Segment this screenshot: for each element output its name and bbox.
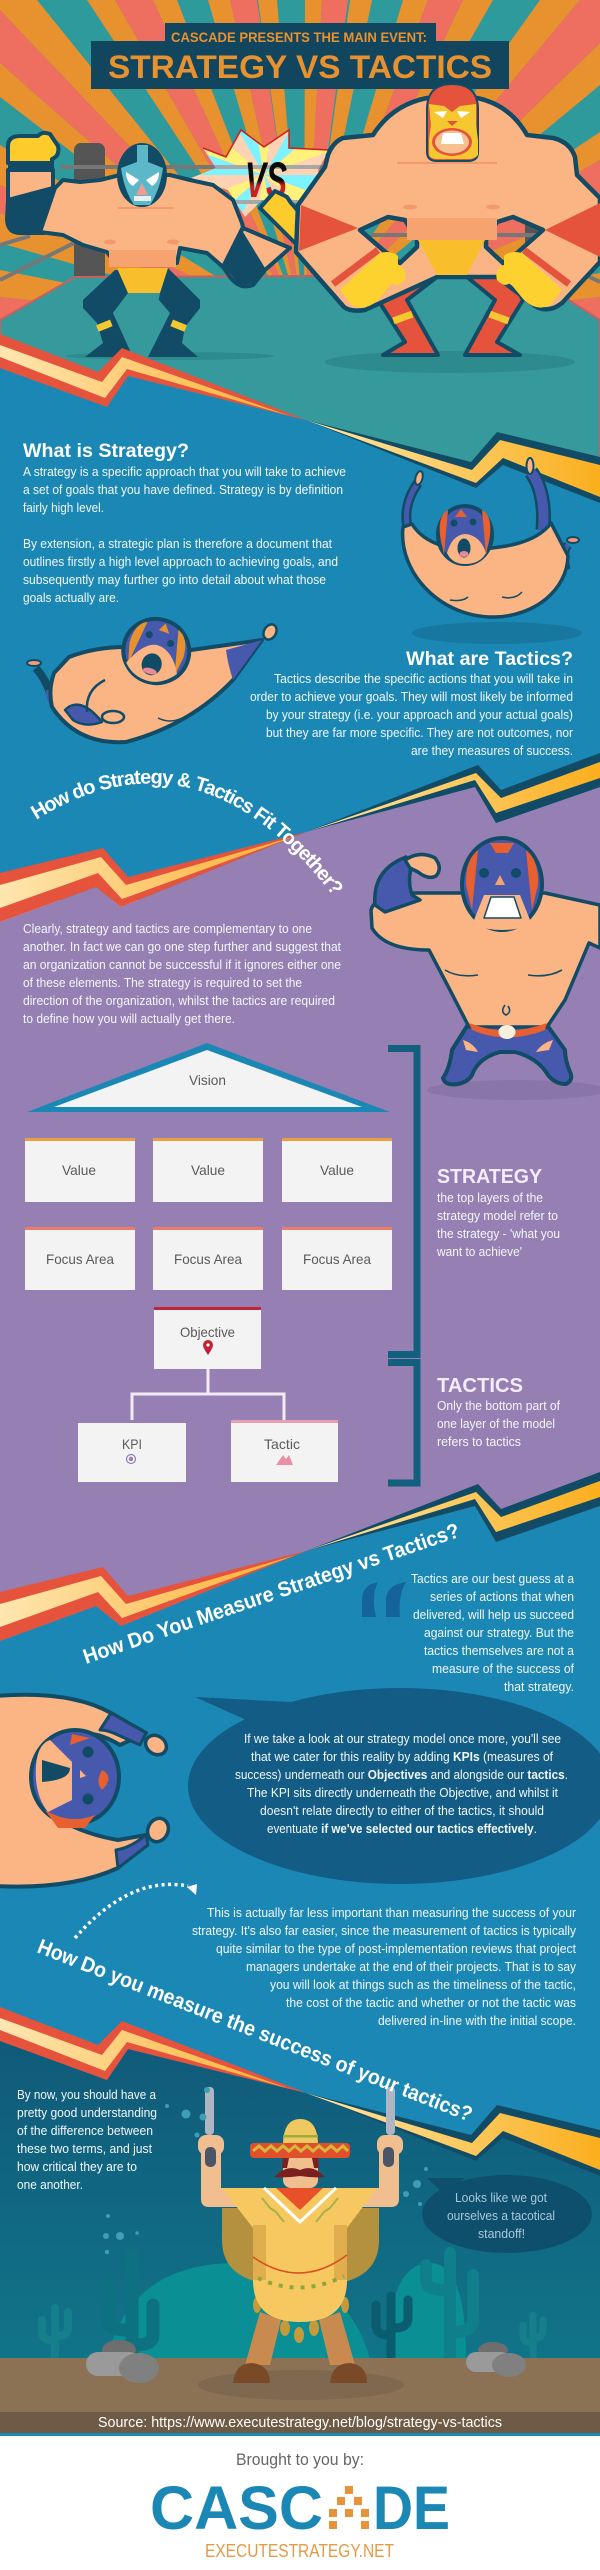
text block: tactics quote: delivered, will help us succeed	[413, 1607, 574, 1622]
callout: speech bubble with KPI text: that we cater for this reality by adding KPIs (measures of	[251, 1749, 553, 1764]
left gun	[205, 2087, 214, 2135]
callout: speech bubble with KPI text: The KPI sits directly underneath the Objective, and whilst it	[247, 1785, 558, 1800]
callout: tacotical standoff bubble: ourselves a tacotical	[447, 2208, 555, 2223]
text block: strategy definition: goals actually are.	[23, 590, 119, 605]
panel: how do you measure background	[0, 1506, 600, 2220]
heading: how do you measure strategy vs tactics: How Do You Measure Strategy vs Tactics?	[80, 1519, 462, 1669]
logo: Cascade: CASC	[150, 2474, 323, 2542]
panel: hero sunburst background	[0, 0, 600, 330]
illustration: wrestler from above	[0, 1695, 172, 1887]
bubbles	[103, 2087, 428, 2254]
cape	[222, 2208, 379, 2283]
text block: complementary: another. In fact we can go one step further and suggest that	[23, 939, 341, 954]
text block: strategy definition: outlines firstly a high level approach to achieving goals, and	[23, 554, 338, 569]
text block: strategy label	[436, 1166, 560, 1259]
boots	[233, 2363, 367, 2383]
text block: tactics quote: series of actions that when	[430, 1589, 574, 1604]
head	[283, 2155, 318, 2188]
text block: strategy definition: a set of goals that you have defined. Strategy is by definition	[23, 482, 343, 497]
text block: measuring tactics: managers undertake at the end of their projects. That is to say	[246, 1959, 576, 1974]
tactic box	[231, 1420, 338, 1482]
illustration: flexing wrestler	[371, 838, 600, 1100]
vision triangle	[27, 1043, 390, 1112]
text block: tactics definition: order to achieve your goals. They will most likely be informed	[250, 689, 573, 704]
callout: speech bubble with KPI text: doesn't relate directly to either of the tactics, it should	[260, 1803, 544, 1818]
head	[117, 143, 167, 207]
callout: speech bubble with KPI text: eventuate if we've selected our tactics effectively.	[267, 1821, 537, 1836]
poncho	[222, 2188, 377, 2322]
hat	[283, 2119, 318, 2143]
illustration: gunslinger	[198, 2087, 404, 2400]
text block: strategy definition: fairly high level.	[23, 500, 104, 515]
title: CASCADE PRESENTS THE MAIN EVENT:	[171, 29, 427, 45]
text block: measuring tactics: the cost of the tactic and whether or not the tactic was	[286, 1995, 576, 2010]
text block: tactics definition: Tactics describe the specific actions that you will take in	[274, 671, 573, 686]
arm	[375, 857, 420, 912]
text block: conclusion	[17, 2087, 157, 2192]
text block: measuring tactics: you will look at things such as the timeliness of the tactic,	[270, 1977, 576, 1992]
head	[427, 84, 478, 161]
text block: conclusion: By now, you should have a	[17, 2087, 157, 2102]
text block: tactics quote: measure of the success of	[432, 1661, 574, 1676]
text block: complementary: to define how you will actually get there.	[23, 1011, 235, 1026]
text block: strategy label: the top layers of the	[437, 1190, 543, 1205]
diagram: strategy model	[25, 1043, 392, 1482]
text block: strategy definition: A strategy is a specific approach that you will take to achieve	[23, 464, 346, 479]
focus area boxes: Focus Area	[174, 1251, 242, 1267]
illustration: falling wrestler left	[27, 612, 279, 742]
text block: tactics quote: that strategy.	[504, 1679, 574, 1694]
text block: tactics label	[437, 1375, 560, 1449]
legs	[245, 2312, 355, 2365]
callout: speech bubble with KPI text: success) underneath our Objectives and alongside our tactics.	[235, 1767, 568, 1782]
value boxes: Value	[191, 1162, 225, 1178]
trunks	[418, 240, 485, 275]
heading: what is strategy: What is Strategy?	[23, 441, 189, 462]
text block: measuring tactics	[192, 1905, 577, 2028]
kpi box	[78, 1423, 186, 1482]
text block: complementary: of these elements. The strategy is required to set the	[23, 975, 302, 990]
objective box: Objective	[180, 1324, 235, 1340]
text block: strategy definition: subsequently may further go into detail about what those	[23, 572, 326, 587]
bracket: strategy	[388, 1048, 417, 1354]
ring posts and ropes	[0, 143, 600, 290]
objective box	[154, 1307, 261, 1369]
text block: conclusion: pretty good understanding	[17, 2105, 157, 2120]
text block: strategy definition	[23, 464, 346, 605]
callout: speech bubble with KPI text	[188, 1688, 600, 1884]
value boxes: Value	[62, 1162, 96, 1178]
legs	[83, 268, 200, 357]
gloves	[340, 252, 406, 308]
body	[296, 98, 600, 311]
vision triangle: Vision	[189, 1072, 226, 1088]
lightning bolt divider 3	[0, 1472, 600, 1641]
source bar: Source: https://www.executestrategy.net/blog/strategy-vs-tactics	[98, 2414, 502, 2431]
text block: measuring tactics: strategy. It's also far easier, since the measurement of tactics is typically	[192, 1923, 576, 1938]
callout: tacotical standoff bubble: standoff!	[478, 2226, 525, 2241]
text block: complementary: Clearly, strategy and tactics are complementary to one	[23, 921, 312, 936]
text block: conclusion: these two terms, and just	[17, 2141, 152, 2156]
lightning bolt divider 2	[0, 753, 600, 922]
rocks	[86, 2340, 526, 2383]
raised arm	[8, 170, 53, 200]
text block: tactics label: Only the bottom part of	[437, 1398, 560, 1413]
text block: tactics definition	[250, 671, 574, 758]
kpi box: KPI	[122, 1436, 142, 1452]
text block: complementary	[23, 921, 341, 1026]
legs	[378, 248, 438, 355]
text block: tactics label: refers to tactics	[437, 1434, 521, 1449]
tactic box: Tactic	[264, 1436, 300, 1452]
logo: Cascade	[150, 2474, 450, 2542]
heading: what are tactics: What are Tactics?	[406, 649, 573, 670]
floor shadows	[65, 351, 575, 373]
text block: strategy label: strategy model refer to	[437, 1208, 558, 1223]
text block: measuring tactics: delivered in-line with the initial scope.	[378, 2013, 576, 2028]
text block: strategy definition: By extension, a strategic plan is therefore a document that	[23, 536, 332, 551]
callout: speech bubble with KPI text: If we take a look at our strategy model once more, you'll see	[244, 1731, 561, 1746]
lightning bolt divider 4	[0, 2007, 600, 2176]
arrow: dotted curve	[75, 1884, 197, 1938]
text block: strategy label: STRATEGY	[437, 1166, 543, 1188]
ring floor	[0, 275, 600, 530]
panel: how they fit together background	[0, 787, 600, 1660]
text block: conclusion: of the difference between	[17, 2123, 153, 2138]
panel: standoff scene background	[0, 2041, 600, 2436]
text block: tactics quote: tactics themselves are not a	[424, 1643, 575, 1658]
focus area boxes: Focus Area	[46, 1251, 114, 1267]
text block: conclusion: one another.	[17, 2177, 83, 2192]
value boxes: Value	[320, 1162, 354, 1178]
title: STRATEGY VS TACTICS	[108, 49, 492, 85]
text block: measuring tactics: This is actually far less important than measuring the success of your	[207, 1905, 577, 1920]
text block: tactics label: TACTICS	[437, 1375, 523, 1397]
wrestler: tactics (red mask)	[296, 84, 600, 355]
text block: measuring tactics: quite similar to the type of post-implementation reviews that project	[216, 1941, 576, 1956]
text block: complementary: direction of the organization, whilst the tactics are required	[23, 993, 335, 1008]
arm bands	[299, 205, 358, 251]
right gun	[386, 2087, 395, 2135]
callout: tacotical standoff bubble: Looks like we got	[455, 2190, 547, 2205]
glove	[260, 191, 306, 243]
text block: conclusion: how critical they are to	[17, 2159, 137, 2174]
panel: what is strategy background	[0, 368, 600, 900]
callout: tacotical standoff bubble	[422, 2175, 592, 2253]
text block: tactics quote	[411, 1571, 575, 1694]
heading: how do you measure the success of your tactics: How Do you measure the success of your tactics?	[34, 1935, 476, 2126]
text block: tactics definition: by your strategy (i.e. your approach and your actual goals)	[266, 707, 573, 722]
connectors	[132, 1369, 284, 1420]
icon: VS burst	[191, 128, 328, 217]
text block: tactics definition: are they measures of success.	[411, 743, 573, 758]
heading: how do strategy and tactics fit together: How do Strategy & Tactics Fit Together?	[30, 770, 342, 892]
collar	[276, 2188, 323, 2210]
text: website: EXECUTESTRATEGY.NET	[205, 2541, 394, 2561]
text block: tactics quote: Tactics are our best guess at a	[411, 1571, 575, 1586]
footer background	[0, 2436, 600, 2570]
title	[91, 23, 509, 89]
logo: Cascade: DE	[373, 2474, 450, 2542]
text block: strategy label: the strategy - 'what you	[437, 1226, 560, 1241]
head	[462, 838, 542, 930]
torso	[371, 893, 600, 1027]
focus area boxes	[25, 1227, 392, 1290]
torso	[40, 175, 243, 267]
bracket: tactics	[388, 1362, 417, 1483]
text block: tactics definition: but they are far more specific. They are not outcomes, nor	[266, 725, 574, 740]
text block: tactics quote: against our strategy. But the	[424, 1625, 574, 1640]
belt	[469, 1023, 547, 1038]
trunks	[117, 268, 168, 293]
text block: tactics label: one layer of the model	[437, 1416, 555, 1431]
wrestler: strategy (blue mask)	[7, 133, 306, 357]
ground	[0, 2358, 600, 2412]
focus area boxes: Focus Area	[303, 1251, 371, 1267]
value boxes	[25, 1138, 392, 1202]
text block: complementary: an organization cannot be successful if it ignores either one	[23, 957, 341, 972]
shorts and legs	[443, 1023, 571, 1084]
icon: VS burst: VS	[245, 152, 287, 208]
desert hills	[107, 2263, 466, 2358]
right arm	[223, 228, 290, 286]
text block: strategy label: want to achieve'	[436, 1244, 522, 1259]
icon: quotation mark	[362, 1582, 406, 1617]
source bar	[0, 2412, 600, 2436]
lightning bolt divider 1	[0, 334, 600, 503]
illustration: falling wrestler right	[403, 458, 582, 644]
fringe	[253, 2297, 349, 2343]
text: brought to you by: Brought to you by:	[236, 2450, 364, 2469]
arms	[201, 2140, 399, 2207]
cacti	[42, 2253, 543, 2358]
